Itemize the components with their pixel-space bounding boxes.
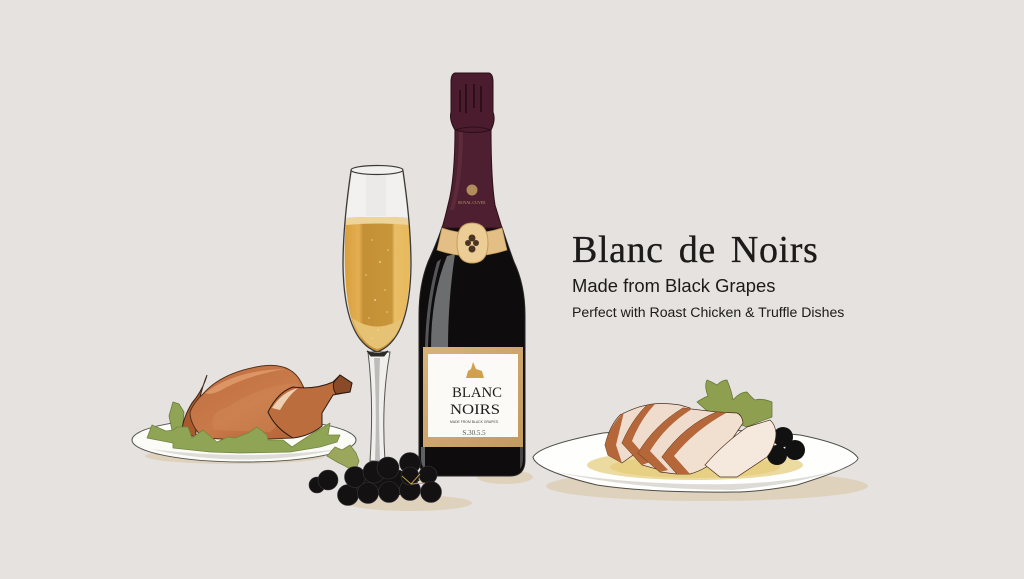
- icon: champagne bottle: ROYAL CUVEE: [458, 200, 486, 205]
- title: Blanc de Noirs: [572, 229, 818, 271]
- icon: champagne flute: [343, 166, 411, 461]
- gold neck band: [437, 228, 507, 256]
- leaves: [697, 380, 772, 427]
- icon: champagne bottle: [419, 73, 525, 476]
- subtitle: Made from Black Grapes: [572, 275, 775, 296]
- icon: black grapes: [309, 445, 442, 506]
- neck medallion: [466, 184, 478, 196]
- truffles: [767, 427, 805, 465]
- foil neck: [442, 128, 502, 228]
- plate: [533, 429, 858, 492]
- glass outline: [343, 171, 411, 352]
- slice 1: [605, 405, 650, 463]
- bottle label: BLANC: [452, 385, 502, 401]
- plate: [132, 418, 356, 462]
- wine: [345, 217, 410, 352]
- leg: [268, 375, 352, 438]
- slice 4: [662, 412, 743, 474]
- bottle label: NOIRS: [450, 402, 500, 418]
- icon: sliced chicken plate: [533, 380, 858, 492]
- chicken body: [190, 365, 322, 440]
- slice 5: [705, 420, 776, 477]
- stem: [368, 352, 390, 461]
- bottle label: MADE FROM BLACK GRAPES: [450, 420, 499, 424]
- body: [419, 227, 525, 476]
- bottle label: S.30.5.5: [462, 429, 486, 437]
- body reflection: [431, 254, 455, 348]
- pairing text: Perfect with Roast Chicken & Truffle Dishes: [572, 304, 844, 320]
- lettuce front: [147, 423, 340, 453]
- shadows on table: [145, 448, 868, 511]
- slice 3: [638, 408, 717, 474]
- tail: [182, 375, 207, 438]
- crest: [466, 362, 484, 378]
- lettuce back: [169, 402, 184, 436]
- bottle label: [423, 347, 523, 447]
- sauce: [587, 450, 803, 480]
- cap: [450, 73, 494, 132]
- glass highlights: [346, 172, 408, 217]
- slice 2: [622, 404, 690, 470]
- icon: roast chicken plate: [132, 365, 356, 462]
